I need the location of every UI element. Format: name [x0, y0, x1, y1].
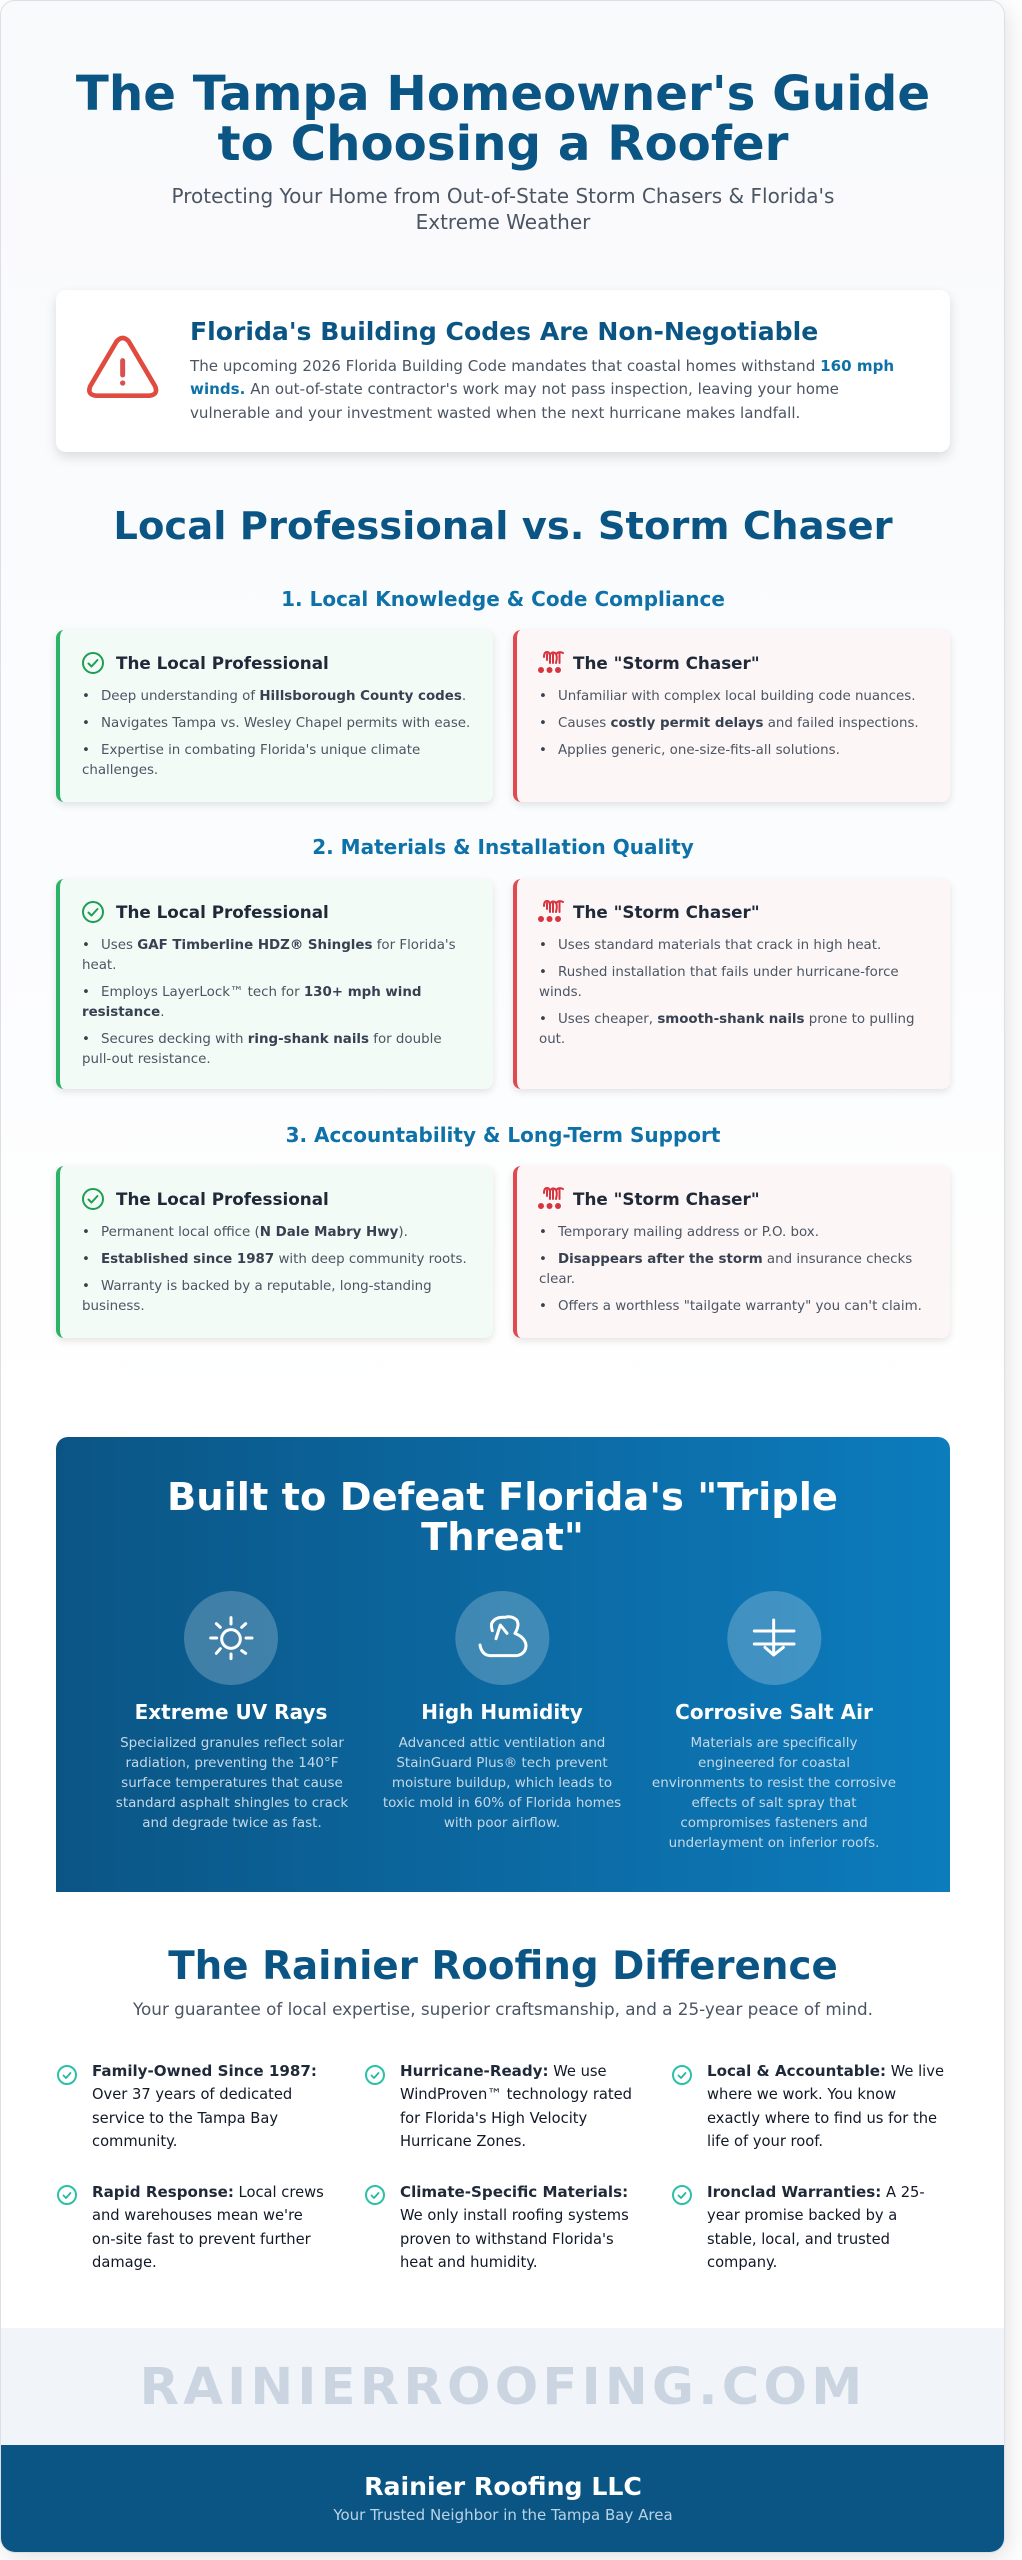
- benefit text: on-site fast to prevent further: [92, 2231, 311, 2248]
- threat text: salt air: effects of salt spray that: [691, 1795, 857, 1811]
- threat text: salt air: [652, 1735, 896, 1851]
- benefit text: [92, 2183, 324, 2271]
- benefit text: stable, local, and trusted: [707, 2231, 890, 2248]
- icon: storm cloud: [538, 900, 564, 922]
- benefit text: proven to withstand Florida's: [400, 2231, 614, 2248]
- benefit text: Over 37 years of dedicated: [92, 2086, 292, 2103]
- benefit text: damage.: [92, 2254, 157, 2271]
- bullet list: •: [82, 1279, 90, 1294]
- threat text: humidity: [383, 1735, 621, 1831]
- icon: salt air: [727, 1591, 822, 1685]
- bullet list: winds.: [539, 985, 582, 1000]
- bullet list: Uses standard materials that crack in high heat.: [558, 938, 881, 953]
- bullet list: [82, 689, 470, 778]
- website watermark: RAINIERROOFING.COM: [140, 2357, 866, 2417]
- bullet list: Expertise in combating Florida's unique climate: [101, 743, 420, 758]
- benefit text: community.: [92, 2133, 177, 2150]
- bullet list: Causes costly permit delays and failed inspections.: [558, 716, 919, 731]
- light upper background: [1, 1, 1005, 1438]
- bullet list: Deep understanding of Hillsborough County codes.: [101, 689, 466, 704]
- bullet list: challenges.: [82, 763, 158, 778]
- triple threat heading: Threat": [421, 1515, 584, 1560]
- icon: green check: [82, 901, 104, 923]
- benefit text: We only install roofing systems: [400, 2207, 629, 2224]
- icon: green check: [82, 1188, 104, 1210]
- bullet list: •: [539, 965, 547, 980]
- bullet list: [539, 1225, 922, 1314]
- bullet list: •: [539, 938, 547, 953]
- bullet list: •: [82, 716, 90, 731]
- bullet list: Established since 1987 with deep community roots.: [101, 1252, 467, 1267]
- card: local professional, knowledge: [56, 630, 493, 802]
- card title: The Local Professional: [116, 902, 329, 922]
- benefit text: where we work. You know: [707, 2086, 896, 2103]
- benefit text: [707, 2181, 925, 2275]
- threat text: salt air: environments to resist the corrosive: [652, 1775, 896, 1791]
- threat text: humidity: toxic mold in 60% of Florida homes: [383, 1795, 621, 1811]
- bullet list: [539, 938, 914, 1047]
- bullet list: Uses cheaper, smooth-shank nails prone to pulling: [558, 1012, 914, 1027]
- subtitle: Extreme Weather: [416, 210, 590, 234]
- company name: Rainier Roofing LLC: [364, 2472, 642, 2501]
- benefit text: year promise backed by a: [707, 2207, 897, 2224]
- benefit text: WindProven™ technology rated: [400, 2086, 632, 2103]
- heading: difference: The Rainier Roofing Difference: [168, 1944, 838, 1989]
- benefit text: [92, 2062, 317, 2150]
- threat title: humidity: High Humidity: [421, 1700, 583, 1724]
- card title: The "Storm Chaser": [573, 902, 760, 922]
- benefit text: company.: [707, 2254, 777, 2271]
- bullet list: •: [539, 716, 547, 731]
- bullet list: pull-out resistance.: [82, 1052, 211, 1067]
- threat text: UV: and degrade twice as fast.: [142, 1815, 322, 1831]
- benefit text: exactly where to find us for the: [707, 2110, 937, 2127]
- bullet list: •: [82, 1225, 90, 1240]
- bullet list: Warranty is backed by a reputable, long-standing: [101, 1279, 432, 1294]
- bullet list: •: [539, 689, 547, 704]
- card: local professional, materials: [56, 879, 493, 1089]
- benefit text: Rapid Response: Local crews: [92, 2183, 324, 2201]
- bullet list: Applies generic, one-size-fits-all solutions.: [558, 743, 840, 758]
- benefit text: [707, 2062, 944, 2150]
- bullet list: •: [539, 1225, 547, 1240]
- benefit text: for Florida's High Velocity: [400, 2110, 587, 2127]
- bullet list: clear.: [539, 1272, 575, 1287]
- bullet list: •: [539, 1012, 547, 1027]
- benefit: climate-specific materials: [365, 2183, 629, 2271]
- footer: [1, 2445, 1005, 2552]
- bullet list: Unfamiliar with complex local building code nuances.: [558, 689, 915, 704]
- card title: The Local Professional: [116, 1189, 329, 1209]
- icon: warning triangle: [86, 336, 158, 398]
- bullet list: •: [82, 985, 90, 1000]
- benefit text: Ironclad Warranties: A 25-: [707, 2183, 925, 2201]
- benefit text: [400, 2183, 629, 2271]
- benefit: hurricane-ready: [365, 2062, 632, 2150]
- alert body: vulnerable and your investment wasted when the next hurricane makes landfall.: [190, 404, 800, 422]
- title: [76, 66, 930, 172]
- card title: The Local Professional: [116, 653, 329, 673]
- threat text: UV: surface temperatures that cause: [121, 1775, 343, 1791]
- section heading 1: 1. Local Knowledge & Code Compliance: [281, 587, 725, 611]
- threat title: salt air: Corrosive Salt Air: [675, 1700, 873, 1724]
- bullet list: out.: [539, 1032, 565, 1047]
- icon: teal check: [672, 2065, 692, 2085]
- bullet list: Disappears after the storm and insurance checks: [558, 1252, 912, 1267]
- bullet list: •: [82, 743, 90, 758]
- icon: teal check: [57, 2065, 77, 2085]
- benefit text: Hurricane Zones.: [400, 2133, 526, 2150]
- icon: teal check: [672, 2185, 692, 2205]
- bullet list: Navigates Tampa vs. Wesley Chapel permits with ease.: [101, 716, 470, 731]
- card: storm chaser, accountability: [513, 1166, 950, 1338]
- card: storm chaser, materials: [513, 879, 950, 1089]
- bullet list: Offers a worthless "tailgate warranty" you can't claim.: [558, 1299, 922, 1314]
- tagline: Your Trusted Neighbor in the Tampa Bay Area: [333, 2506, 673, 2524]
- threat text: humidity: with poor airflow.: [444, 1815, 560, 1831]
- threat title: UV: Extreme UV Rays: [135, 1700, 327, 1724]
- subtitle: [172, 184, 834, 234]
- threat text: humidity: Advanced attic ventilation and: [399, 1735, 605, 1751]
- bullet list: •: [82, 689, 90, 704]
- bullet list: •: [539, 1299, 547, 1314]
- threat text: UV: [116, 1735, 348, 1831]
- difference subtitle: Your guarantee of local expertise, superior craftsmanship, and a 25-year peace of mind.: [133, 1999, 873, 2019]
- bullet list: •: [539, 743, 547, 758]
- benefit text: life of your roof.: [707, 2133, 823, 2150]
- bullet list: resistance.: [82, 1005, 164, 1020]
- triple threat heading: Built to Defeat Florida's "Triple: [167, 1475, 838, 1520]
- icon: sun: [184, 1591, 278, 1685]
- card: local professional, accountability: [56, 1166, 493, 1338]
- bullet list: Uses GAF Timberline HDZ® Shingles for Florida's: [101, 938, 456, 953]
- threat text: UV: standard asphalt shingles to crack: [116, 1795, 348, 1811]
- benefit text: service to the Tampa Bay: [92, 2110, 278, 2127]
- subtitle: Protecting Your Home from Out-of-State Storm Chasers & Florida's: [172, 184, 834, 208]
- benefit text: [400, 2062, 632, 2150]
- bullet list: [82, 938, 456, 1067]
- heading: comparison: Local Professional vs. Storm Chaser: [113, 504, 893, 549]
- threat text: humidity: StainGuard Plus® tech prevent: [396, 1755, 608, 1771]
- icon: green check: [82, 652, 104, 674]
- icon: humidity: [455, 1591, 550, 1685]
- benefit text: Hurricane-Ready: We use: [400, 2062, 607, 2080]
- threat text: salt air: compromises fasteners and: [680, 1815, 868, 1831]
- card title: The "Storm Chaser": [573, 653, 760, 673]
- benefit text: Climate-Specific Materials:: [400, 2183, 628, 2201]
- bullet list: Permanent local office (N Dale Mabry Hwy).: [101, 1225, 408, 1240]
- panel: triple threat: [56, 1437, 950, 1892]
- section heading 2: 2. Materials & Installation Quality: [312, 835, 694, 859]
- bullet list: •: [82, 938, 90, 953]
- icon: teal check: [365, 2065, 385, 2085]
- icon: storm cloud: [538, 651, 564, 673]
- alert body: [190, 357, 894, 422]
- bullet list: business.: [82, 1299, 145, 1314]
- bullet list: Employs LayerLock™ tech for 130+ mph wind: [101, 985, 422, 1000]
- card title: The "Storm Chaser": [573, 1189, 760, 1209]
- bullet list: •: [539, 1252, 547, 1267]
- alert body: The upcoming 2026 Florida Building Code mandates that coastal homes withstand 160 mph: [190, 357, 894, 375]
- bullet list: [539, 689, 919, 758]
- benefit text: Local & Accountable: We live: [707, 2062, 944, 2080]
- bullet list: [82, 1225, 467, 1314]
- benefit text: Family-Owned Since 1987:: [92, 2062, 317, 2080]
- bullet list: •: [82, 1252, 90, 1267]
- bullet list: Rushed installation that fails under hurricane-force: [558, 965, 899, 980]
- alert heading: Florida's Building Codes Are Non-Negotiable: [190, 317, 818, 346]
- benefit text: heat and humidity.: [400, 2254, 538, 2271]
- panel: building code alert: [56, 290, 950, 452]
- icon: teal check: [365, 2185, 385, 2205]
- bullet list: Temporary mailing address or P.O. box.: [558, 1225, 819, 1240]
- threat text: salt air: Materials are specifically: [690, 1735, 858, 1751]
- title: to Choosing a Roofer: [218, 116, 788, 172]
- threat text: salt air: underlayment on inferior roofs.: [669, 1835, 879, 1851]
- icon: storm cloud: [538, 1187, 564, 1209]
- threat text: salt air: engineered for coastal: [698, 1755, 850, 1771]
- website band: [1, 2328, 1005, 2445]
- threat text: humidity: moisture buildup, which leads to: [392, 1775, 612, 1791]
- benefit: local and accountable: [672, 2062, 944, 2150]
- section heading 3: 3. Accountability & Long-Term Support: [286, 1123, 720, 1147]
- bullet list: Secures decking with ring-shank nails for double: [101, 1032, 442, 1047]
- threat text: UV: Specialized granules reflect solar: [120, 1735, 344, 1751]
- alert body: winds. An out-of-state contractor's work may not pass inspection, leaving your home: [190, 380, 839, 398]
- benefit text: and warehouses mean we're: [92, 2207, 303, 2224]
- benefit: ironclad warranties: [672, 2183, 925, 2271]
- benefit: rapid response: [57, 2183, 324, 2271]
- benefit: family-owned: [57, 2062, 317, 2150]
- threat text: UV: radiation, preventing the 140°F: [125, 1755, 339, 1771]
- bullet list: •: [82, 1032, 90, 1047]
- title: The Tampa Homeowner's Guide: [76, 66, 930, 122]
- card: storm chaser, knowledge: [513, 630, 950, 802]
- bullet list: heat.: [82, 958, 116, 973]
- triple threat heading: [167, 1475, 838, 1560]
- icon: teal check: [57, 2185, 77, 2205]
